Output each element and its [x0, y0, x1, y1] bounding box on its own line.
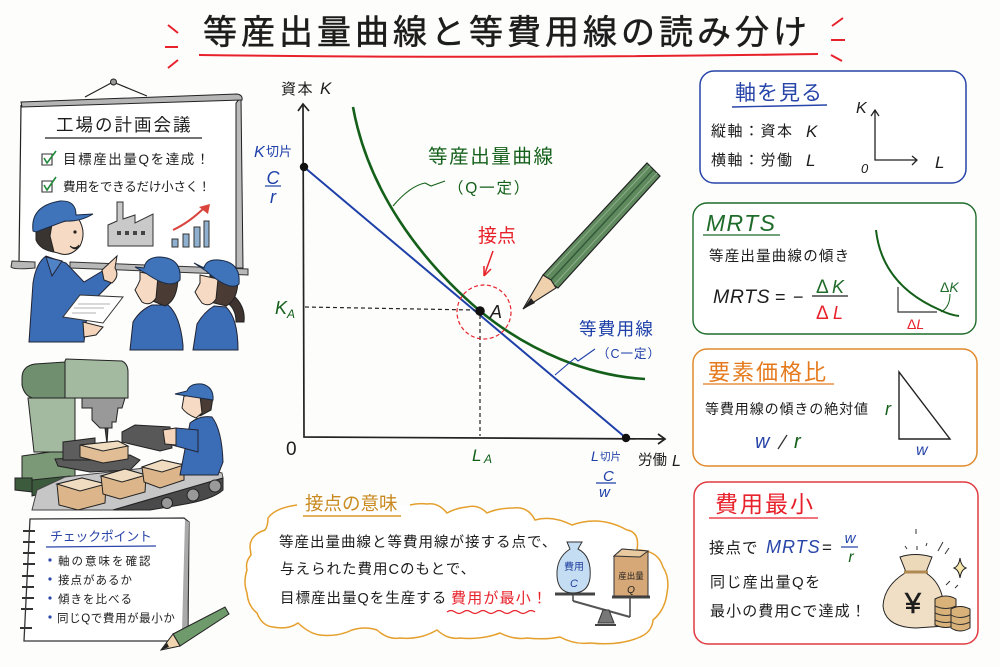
MRTS formula: −: [793, 287, 804, 307]
mini axes: K: [856, 100, 868, 117]
MRTS mini diagram: [876, 230, 959, 332]
machine operator: [163, 384, 223, 475]
axes: [298, 104, 665, 444]
price ratio triangle: [885, 372, 950, 459]
cost minimum condition: 接点で: [709, 539, 759, 557]
axis labels: L: [672, 453, 681, 470]
tangent guides: [305, 307, 480, 436]
MRTS formula: K: [832, 277, 845, 297]
axes text: [711, 122, 818, 170]
icon: money bag and coins: ¥: [904, 588, 922, 620]
MRTS mini diagram: ΔL: [907, 316, 924, 332]
output box: Q: [627, 585, 635, 596]
axis labels: 労働: [638, 452, 667, 469]
L intercept label: C: [603, 468, 614, 485]
axes text: 縦軸：資本: [711, 123, 794, 140]
cost minimum condition: r: [848, 549, 854, 566]
cost minimum text: [710, 574, 867, 620]
KA and LA labels: K: [275, 298, 288, 318]
price ratio triangle: w: [916, 442, 929, 459]
checklist items: 同じQで費用が最小か: [57, 611, 175, 625]
cloud body text: 与えられた費用Cのもとで、: [280, 561, 476, 578]
isoquant label: [393, 146, 555, 206]
cloud body text: 目標産出量Qを生産する: [280, 590, 447, 607]
L intercept label: 切片: [600, 450, 621, 463]
KA and LA labels: L: [472, 446, 481, 465]
MRTS heading: MRTS: [706, 210, 776, 236]
icon: small pencil: [161, 607, 229, 650]
checklist items: 接点があるか: [58, 573, 133, 587]
price ratio triangle: r: [885, 399, 892, 419]
mini axes: 0: [861, 161, 869, 176]
MRTS formula: =: [775, 287, 786, 307]
machine table and vise: [55, 425, 172, 472]
cost minimum heading: 費用最小: [715, 491, 815, 517]
checklist items: 軸の意味を確認: [58, 554, 152, 568]
tangent label: 接点: [478, 225, 516, 247]
panel: MRTS: [693, 203, 976, 334]
intercept dots: [300, 163, 630, 442]
MRTS mini diagram: ΔK: [940, 279, 959, 295]
panel: meeting scene: [11, 79, 248, 350]
cloud body text: 等産出量曲線と等費用線が接する点で、: [279, 533, 557, 551]
isocost label: （C一定）: [597, 347, 661, 361]
output box: 産出量: [618, 571, 644, 581]
mini axes: [856, 100, 944, 176]
isocost label: [555, 319, 661, 375]
MRTS formula: MRTS: [713, 286, 770, 308]
cost bag: [557, 542, 590, 593]
tangent point A: A: [489, 302, 502, 322]
MRTS formula: Δ: [816, 303, 829, 324]
checklist items: 傾きを比べる: [58, 593, 133, 606]
isoquant label: （Q一定）: [448, 179, 531, 197]
MRTS formula: Δ: [816, 277, 829, 298]
panel: factor price ratio: [693, 349, 977, 466]
title: [165, 14, 845, 68]
checklist: 目標産出量Qを達成！: [63, 152, 211, 167]
L intercept label: w: [599, 484, 611, 501]
tangent label: [478, 225, 516, 276]
isocost line: [304, 167, 626, 438]
title: 等産出量曲線と等費用線の読み分け: [203, 14, 811, 52]
K intercept label: [254, 144, 292, 207]
cloud body text: [279, 533, 557, 614]
checklist: [42, 151, 211, 194]
icon: balance scale: [555, 542, 650, 625]
chart: isoquant and isocost: [254, 79, 681, 501]
cost minimum condition: MRTS: [766, 537, 821, 557]
cloud body text: 費用が最小！: [451, 590, 548, 607]
cost minimum condition: [709, 530, 858, 566]
tangent point A: [457, 285, 511, 339]
cardboard boxes: [57, 460, 184, 510]
price ratio formula: w: [755, 431, 771, 453]
K intercept label: 切片: [266, 144, 292, 159]
K intercept label: K: [254, 144, 266, 161]
axis labels: 0: [286, 439, 297, 460]
isoquant label: 等産出量曲線: [428, 146, 555, 168]
cloud heading: 接点の意味: [305, 493, 398, 514]
panel: cost minimum: [694, 482, 978, 644]
cost minimum condition: =: [822, 538, 832, 557]
output box: [614, 549, 648, 596]
cost minimum text: 同じ産出量Qを: [710, 574, 821, 591]
whiteboard: [11, 79, 248, 275]
worker listening: [130, 257, 183, 350]
panel: checkpoint notebook: [20, 518, 189, 641]
price ratio formula: r: [794, 431, 802, 453]
axis labels: [281, 79, 681, 470]
MRTS formula: [713, 277, 848, 324]
icon: factory: [108, 202, 153, 246]
worker with ponytail: [193, 260, 244, 350]
KA and LA labels: [275, 298, 492, 466]
axis labels: K: [320, 79, 332, 98]
conveyor belt: [32, 463, 223, 510]
board heading: 工場の計画会議: [56, 115, 192, 135]
icon: rising bar chart: [172, 204, 210, 247]
checklist items: [48, 554, 175, 625]
cost minimum text: 最小の費用Cで達成！: [710, 603, 867, 620]
KA and LA labels: A: [483, 452, 492, 466]
isoquant curve: [353, 107, 645, 379]
L intercept label: L: [591, 448, 599, 464]
panel: meaning of tangency cloud: [245, 493, 668, 644]
isocost label: 等費用線: [579, 319, 654, 339]
cost bag: 費用: [564, 560, 584, 573]
axis labels: 資本: [281, 81, 314, 98]
K intercept label: C: [266, 168, 280, 188]
checklist: 費用をできるだけ小さく！: [63, 179, 210, 194]
axes text: K: [806, 122, 818, 141]
axes text: L: [806, 151, 815, 170]
price ratio description: 等費用線の傾きの絶対値: [705, 401, 869, 417]
checkpoint heading: チェックポイント: [50, 529, 152, 544]
cost bag: C: [570, 578, 578, 590]
price ratio formula: [755, 431, 802, 453]
MRTS formula: L: [833, 303, 843, 323]
icon: large pencil: [523, 163, 660, 309]
mini axes: L: [935, 153, 944, 172]
icon: money bag and coins: [883, 529, 970, 631]
panel: machine scene: [15, 359, 223, 510]
milling machine: [15, 359, 128, 496]
cost minimum condition: w: [845, 530, 857, 547]
axes text: 横軸：労働: [711, 152, 794, 169]
panel: read the axes: [700, 71, 966, 183]
axes heading: 軸を見る: [735, 82, 823, 105]
L intercept label: [591, 448, 621, 501]
MRTS description: 等産出量曲線の傾き: [709, 247, 850, 265]
KA and LA labels: A: [286, 307, 295, 321]
K intercept label: r: [270, 187, 277, 207]
presenter: [29, 201, 123, 342]
price ratio heading: 要素価格比: [708, 360, 828, 385]
